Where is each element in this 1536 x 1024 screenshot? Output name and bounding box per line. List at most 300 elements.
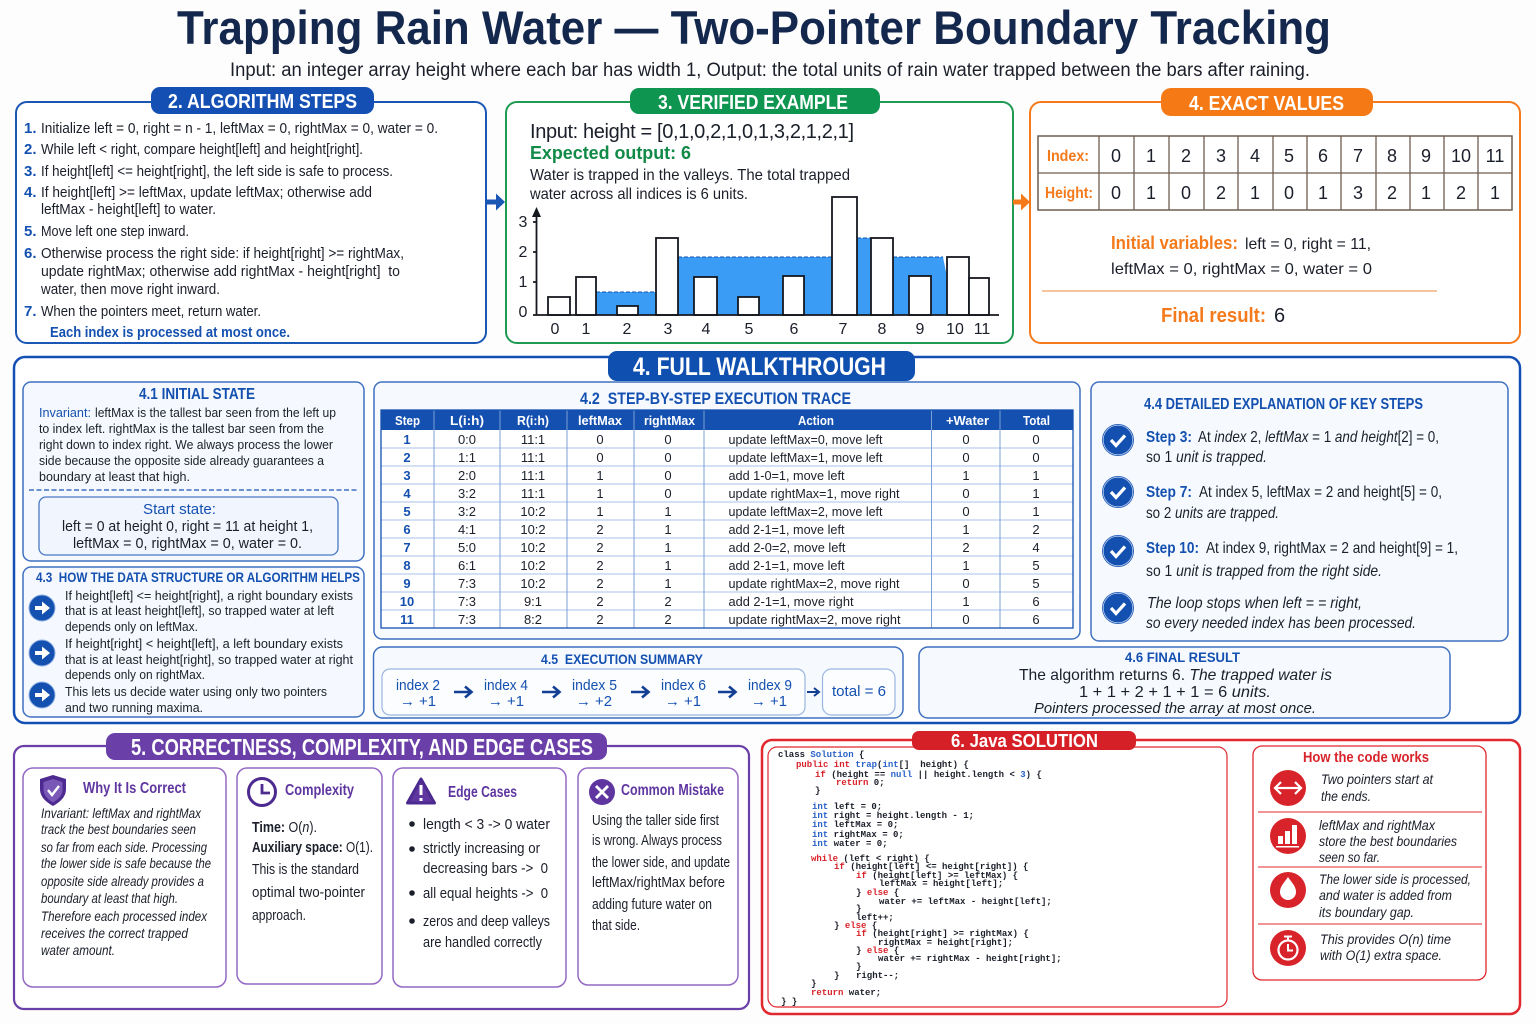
card text: opposite side already provides a (41, 873, 204, 889)
heading: verified example: 3. VERIFIED EXAMPLE (658, 92, 848, 114)
panel: verified example (506, 88, 1013, 343)
table: index and height: 1 (1146, 146, 1156, 166)
note: two pointers (1321, 771, 1434, 804)
panel: full walkthrough (14, 351, 1520, 723)
table: execution trace: 0 (664, 432, 672, 447)
code block: water += leftMax - height[left]; (879, 897, 1052, 907)
table: index and height: 4 (1250, 146, 1260, 166)
code block: } else { (856, 946, 899, 956)
icon: bars (1270, 818, 1306, 854)
initial variables: left = 0, right = 11, (1245, 236, 1371, 253)
table: execution trace: 2 (664, 594, 672, 609)
note: two pointers: the ends. (1321, 788, 1371, 804)
table: index and height (1038, 136, 1512, 210)
explanation: step 3: so 1 unit is trapped. (1146, 449, 1267, 466)
helper text one (65, 588, 353, 634)
step list: update rightMax; otherwise add rightMax - height[right] to (41, 263, 400, 280)
explanation: step 10: so 1 unit is trapped from the right side. (1146, 563, 1382, 580)
explanation: step 7: At index 5, leftMax = 2 and height[5] = 0, (1199, 484, 1442, 501)
total box (822, 669, 895, 715)
code block: if (height[left] <= height[right]) { (834, 862, 1028, 872)
bar chart: elevation and trapped water: 1 (582, 321, 591, 338)
table: execution trace: 0 (664, 450, 672, 465)
step list: 5. (24, 223, 37, 240)
table: execution trace: 9 (403, 576, 411, 591)
explanation: step 7 (1146, 484, 1442, 522)
table: execution trace: 0 (962, 612, 970, 627)
note: best boundaries: leftMax and rightMax (1319, 817, 1436, 833)
bar chart: elevation and trapped water: 10 (946, 321, 964, 338)
code block: return 0; (836, 778, 885, 788)
icon: shield (40, 775, 66, 806)
edge case list (409, 816, 550, 951)
table: execution trace: 1 (596, 468, 604, 483)
table: execution trace: update rightMax=2, move right (728, 576, 900, 591)
table: index and height: 0 (1111, 183, 1121, 203)
note: lower side: its boundary gap. (1319, 904, 1414, 920)
example note (529, 167, 850, 203)
table: index and height: 9 (1421, 146, 1431, 166)
step list: 7. (24, 303, 37, 320)
example note: water across all indices is 6 units. (529, 186, 748, 203)
panel: how the code works (1253, 746, 1486, 980)
table: index and height: 1 (1146, 183, 1156, 203)
table: execution trace: 6 (403, 522, 411, 537)
card text: the lower side, and update (592, 854, 730, 871)
explanation: loop stop (1146, 595, 1416, 632)
panel: final result (919, 647, 1450, 718)
code block: } } (781, 997, 797, 1007)
code block: public int trap(int[] height) { (796, 760, 969, 770)
table: execution trace: 4:1 (458, 522, 476, 537)
table: execution trace: +Water (946, 413, 989, 428)
table: execution trace: 11 (400, 612, 414, 627)
table: index and height: 1 (1490, 183, 1500, 203)
final result text: 1 + 1 + 2 + 1 + 1 = 6 units. (1079, 684, 1271, 701)
table: index and height: 7 (1353, 146, 1363, 166)
table: execution trace: 6 (1032, 612, 1040, 627)
table: execution trace: update leftMax=1, move left (728, 450, 883, 465)
summary flow: → +1 (665, 693, 701, 710)
initial variables: leftMax = 0, rightMax = 0, water = 0 (1111, 261, 1372, 278)
table: execution trace: add 2-1=1, move left (728, 558, 845, 573)
note: lower side: and water is added from (1319, 887, 1452, 903)
step list: When the pointers meet, return water. (41, 303, 261, 320)
summary flow: index 5 (572, 677, 617, 694)
table: index and height: Index: (1047, 148, 1089, 165)
table: execution trace: 2 (596, 594, 604, 609)
summary flow (396, 677, 819, 710)
code block: int leftMax = 0; (812, 820, 898, 830)
table: index and height: 0 (1284, 183, 1294, 203)
table: execution trace: 1 (664, 576, 672, 591)
table: execution trace: 0 (664, 486, 672, 501)
table: execution trace: R(i:h) (517, 413, 549, 428)
table: execution trace: 1 (1032, 486, 1040, 501)
table: execution trace: update leftMax=0, move left (728, 432, 883, 447)
table: execution trace: 1 (1032, 504, 1040, 519)
heading: execution trace: 4.2 STEP-BY-STEP EXECUTION TRACE (580, 389, 851, 408)
explanation: step 3 (1146, 429, 1439, 466)
bar chart: elevation and trapped water: 4 (702, 321, 711, 338)
summary flow: → +1 (400, 693, 436, 710)
card text: optimal two-pointer (252, 884, 365, 901)
card text: so far from each side. Processing (41, 839, 207, 855)
table: execution trace: 1 (596, 486, 604, 501)
card text: track the best boundaries seen (41, 821, 196, 837)
start state box: leftMax = 0, rightMax = 0, water = 0. (73, 535, 302, 552)
heading: algorithm steps: 2. ALGORITHM STEPS (168, 91, 357, 113)
icon: arrow one (29, 595, 55, 621)
table: execution trace: 2:0 (458, 468, 476, 483)
code block: rightMax = height[right]; (878, 938, 1013, 948)
table: index and height: 1 (1250, 183, 1260, 203)
step list: Initialize left = 0, right = n - 1, leftMax = 0, rightMax = 0, water = 0. (41, 120, 438, 137)
panel: exact values (1030, 88, 1520, 343)
code block: if (height[right] >= rightMax) { (856, 929, 1029, 939)
helper text one: that is at least height[left], so trapped water at left (65, 603, 334, 618)
final result: 6 (1274, 305, 1285, 327)
final result text: The algorithm returns 6. The trapped water is (1019, 667, 1332, 684)
initial variables: Initial variables: (1111, 233, 1238, 253)
start state box (39, 497, 338, 555)
card text: water amount. (41, 942, 115, 958)
table: execution trace: 0 (596, 432, 604, 447)
icon: check two (1102, 476, 1134, 508)
heading: execution summary: 4.5 EXECUTION SUMMARY (541, 652, 703, 667)
explanation: loop stop: so every needed index has been processed. (1146, 615, 1416, 632)
card text: Invariant: leftMax and rightMax (41, 805, 202, 821)
panel: algorithm steps (16, 87, 486, 343)
table: execution trace: 3:2 (458, 486, 476, 501)
bar chart: elevation and trapped water: 6 (790, 321, 799, 338)
card: complexity (237, 768, 382, 984)
card text (592, 812, 730, 934)
helper text one: depends only on leftMax. (65, 619, 198, 634)
edge case list: strictly increasing or (423, 840, 540, 857)
icon: water drop (1270, 872, 1306, 908)
code block: int rightMax = 0; (812, 830, 904, 840)
table: execution trace: 0 (664, 468, 672, 483)
table: execution trace: 1 (1032, 468, 1040, 483)
table: index and height: 10 (1451, 146, 1471, 166)
panel: correctness, complexity, edge cases (14, 733, 749, 1009)
card: edge cases (393, 768, 566, 987)
code block: int left = 0; (812, 802, 882, 812)
table: execution trace: Action (798, 413, 834, 428)
note: best boundaries: seen so far. (1319, 849, 1380, 865)
table: execution trace: 10:2 (520, 558, 546, 573)
table: index and height: 2 (1181, 146, 1191, 166)
card: common mistake (578, 768, 738, 985)
summary flow: index 2 (396, 677, 440, 694)
code block: } (856, 904, 861, 914)
summary flow: index 9 (748, 677, 792, 694)
table: execution trace: rightMax (644, 413, 696, 428)
explanation: step 3: Step 3: (1146, 429, 1192, 446)
explanation: step 10 (1146, 540, 1458, 580)
card text: This is the standard (252, 861, 359, 878)
table: execution trace: 1 (403, 432, 411, 447)
helper text three: and two running maxima. (65, 700, 203, 715)
table: execution trace: 10:2 (520, 540, 546, 555)
heading: full walkthrough: 4. FULL WALKTHROUGH (633, 353, 886, 381)
table: execution trace: 2 (596, 558, 604, 573)
table: execution trace: 2 (596, 612, 604, 627)
table: index and height: 11 (1486, 146, 1504, 166)
card text: receives the correct trapped (41, 925, 189, 941)
invariant text: to index left. rightMax is the tallest bar seen from the (39, 421, 324, 436)
explanation: step 10: At index 9, rightMax = 2 and height[9] = 1, (1206, 540, 1458, 557)
code block: int right = height.length - 1; (812, 811, 974, 821)
step list: Otherwise process the right side: if height[right] >= rightMax, (41, 245, 404, 262)
invariant text (39, 405, 336, 484)
code block: } (856, 962, 861, 972)
table: execution trace: add 1-0=1, move left (728, 468, 845, 483)
table: execution trace: 10:2 (520, 576, 546, 591)
bar chart: elevation and trapped water: 2 (519, 244, 528, 261)
explanation: step 10: Step 10: (1146, 540, 1199, 557)
card text: Auxiliary space: O(1). (252, 839, 373, 856)
code block: right--; (856, 971, 899, 981)
explanation: step 7: Step 7: (1146, 484, 1192, 501)
heading: how the algorithm helps: 4.3 HOW THE DATA STRUCTURE OR ALGORITHM HELPS (36, 569, 360, 585)
card text: Using the taller side first (592, 812, 720, 829)
icon: check three (1102, 536, 1134, 566)
code block: } (834, 971, 839, 981)
step list: If height[left] >= leftMax, update leftMax; otherwise add (41, 184, 372, 201)
heading: final result: 4.6 FINAL RESULT (1125, 650, 1241, 665)
table: execution trace: 4 (403, 486, 411, 501)
bar chart: elevation and trapped water: 3 (664, 321, 673, 338)
input text: Input: height = [0,1,0,2,1,0,1,3,2,1,2,1] (530, 121, 854, 143)
card text: Time: O(n). (252, 819, 317, 836)
table: execution trace: 5:0 (458, 540, 476, 555)
heading: java solution: 6. Java SOLUTION (951, 731, 1098, 751)
table: execution trace: 5 (1032, 558, 1040, 573)
table: execution trace: 9:1 (524, 594, 542, 609)
table: execution trace: 0 (962, 576, 970, 591)
table: execution trace: 10:2 (520, 504, 546, 519)
table: execution trace: 2 (596, 576, 604, 591)
code block: if (height == null || height.length < 3) { (815, 770, 1042, 780)
step list: 3. (24, 163, 37, 180)
icon: check four (1102, 592, 1134, 624)
card title: Common Mistake (621, 782, 724, 799)
card text (252, 819, 373, 924)
table: execution trace: 1 (962, 522, 970, 537)
table: index and height: 3 (1216, 146, 1226, 166)
panel: java solution (762, 731, 1520, 1014)
note: complexity: with O(1) extra space. (1320, 947, 1442, 963)
table: execution trace: 11:1 (521, 468, 545, 483)
table: execution trace: 2 (403, 450, 411, 465)
table: execution trace: L(i:h) (450, 413, 484, 428)
icon: stopwatch (1270, 930, 1306, 966)
table: execution trace: 0 (962, 486, 970, 501)
card text: leftMax/rightMax before (592, 874, 725, 891)
code block: } else { (856, 888, 899, 898)
total box: total = 6 (832, 683, 886, 700)
explanation: step 3: At index 2, leftMax = 1 and height[2] = 0, (1198, 429, 1439, 446)
table: index and height: 2 (1456, 183, 1466, 203)
table: execution trace: 7:3 (458, 594, 476, 609)
card text: adding future water on (592, 896, 712, 913)
step list: 1. (24, 120, 37, 137)
icon: warning (408, 779, 434, 803)
table: execution trace: update leftMax=2, move left (728, 504, 883, 519)
table: execution trace: 2 (664, 612, 672, 627)
step list: 2. (24, 141, 37, 158)
table: execution trace: 3:2 (458, 504, 476, 519)
note: lower side (1319, 871, 1471, 920)
table: execution trace: 1 (962, 468, 970, 483)
note: best boundaries (1319, 817, 1457, 865)
table: execution trace: 2 (1032, 522, 1040, 537)
code block: if (height[left] >= leftMax) { (856, 871, 1018, 881)
summary flow: → +1 (488, 693, 524, 710)
bar chart: elevation and trapped water: 8 (878, 321, 887, 338)
panel: execution trace (374, 382, 1080, 639)
bar chart: elevation and trapped water: 11 (974, 321, 990, 338)
explanation: loop stop: The loop stops when left = = right, (1147, 595, 1362, 612)
icon: two pointers (1270, 770, 1306, 806)
bar chart: elevation and trapped water: 9 (916, 321, 925, 338)
helper text two (65, 636, 353, 682)
icon: arrow three (29, 682, 55, 708)
heading: exact values (1161, 88, 1373, 116)
step list: leftMax - height[left] to water. (41, 201, 216, 218)
card text: approach. (252, 907, 306, 924)
card text: Therefore each processed index (41, 908, 208, 924)
heading: detailed explanation: 4.4 DETAILED EXPLANATION OF KEY STEPS (1144, 396, 1423, 413)
code block: } (811, 979, 816, 989)
table: execution trace: Step (395, 413, 420, 428)
table: index and height: 1 (1318, 183, 1328, 203)
note: complexity (1320, 931, 1451, 963)
example note: Water is trapped in the valleys. The total trapped (530, 167, 850, 184)
table: execution trace: 0 (962, 432, 970, 447)
table: execution trace: 2 (596, 522, 604, 537)
invariant text: right down to index right. We always process the lower (39, 437, 334, 452)
summary flow: index 6 (661, 677, 706, 694)
bar chart: elevation and trapped water: 5 (745, 321, 754, 338)
note: two pointers: Two pointers start at (1321, 771, 1434, 787)
bar chart: elevation and trapped water: 7 (839, 321, 848, 338)
table: execution trace: 7 (403, 540, 411, 555)
code block: leftMax = height[left]; (879, 879, 1003, 889)
edge case list: length < 3 -> 0 water (423, 816, 550, 833)
table: execution trace: 0 (1032, 432, 1040, 447)
table: execution trace: 1 (596, 504, 604, 519)
table: index and height: 2 (1216, 183, 1226, 203)
edge case list: all equal heights -> 0 (423, 885, 548, 902)
table: execution trace: add 2-1=1, move right (728, 594, 854, 609)
table: execution trace: 3 (403, 468, 411, 483)
subtitle: Input: an integer array height where each bar has width 1, Output: the total units of rain water trapped between the bars after raining. (230, 60, 1310, 81)
table: execution trace: 1 (664, 558, 672, 573)
heading: initial state: 4.1 INITIAL STATE (139, 386, 255, 403)
table: execution trace: 0 (962, 504, 970, 519)
table: execution trace: Total (1023, 413, 1050, 428)
note: lower side: The lower side is processed, (1319, 871, 1471, 887)
table: execution trace: 0 (962, 450, 970, 465)
card text: boundary at least that high. (41, 890, 178, 906)
note: complexity: This provides O(n) time (1320, 931, 1451, 947)
table: execution trace: 1 (962, 594, 970, 609)
card text: is wrong. Always process (592, 832, 722, 849)
initial variables (1111, 233, 1372, 278)
table: execution trace: 0 (596, 450, 604, 465)
table: index and height: 0 (1111, 146, 1121, 166)
table: execution trace: 7:3 (458, 576, 476, 591)
final result: Final result: (1161, 305, 1266, 327)
table: execution trace: 1 (664, 540, 672, 555)
table: execution trace: update rightMax=2, move right (728, 612, 901, 627)
table: execution trace: 1 (962, 558, 970, 573)
table: execution trace: 1 (664, 522, 672, 537)
icon: clock (248, 778, 276, 806)
bar chart: elevation and trapped water: 3 (519, 214, 528, 231)
code block: int water = 0; (812, 839, 888, 849)
panel: initial state (23, 382, 364, 561)
bar chart: elevation and trapped water: 1 (519, 274, 528, 291)
table: execution trace: 5 (403, 504, 411, 519)
table: execution trace: 7:3 (458, 612, 476, 627)
panel: how the algorithm helps (23, 567, 364, 717)
arrow: example to values (1013, 194, 1030, 210)
table: execution trace: 8:2 (524, 612, 542, 627)
invariant text: boundary at least that high. (39, 469, 190, 484)
icon: check one (1102, 424, 1134, 456)
step list: water, then move right inward. (40, 281, 220, 298)
card title: Why It Is Correct (83, 780, 187, 797)
edge case list: are handled correctly (423, 934, 542, 951)
helper text one: If height[left] <= height[right], a right boundary exists (65, 588, 353, 603)
title: Trapping Rain Water — Two-Pointer Boundary Tracking (177, 1, 1331, 54)
heading: correctness: 5. CORRECTNESS, COMPLEXITY, AND EDGE CASES (131, 734, 593, 760)
table: execution trace: add 2-1=1, move left (728, 522, 845, 537)
panel: execution summary (374, 647, 903, 718)
step list: 4. (24, 184, 37, 201)
table: execution trace: add 2-0=2, move left (728, 540, 846, 555)
step list (24, 120, 438, 341)
table: execution trace: 11:1 (521, 486, 545, 501)
helper text two: If height[right] < height[left], a left boundary exists (65, 636, 343, 651)
icon: x mark (589, 779, 615, 805)
table: execution trace: 11:1 (521, 450, 545, 465)
table: index and height: 2 (1387, 183, 1397, 203)
table: execution trace: 0 (1032, 450, 1040, 465)
table: execution trace: 10:2 (520, 522, 546, 537)
icon: arrow two (29, 640, 55, 666)
table: execution trace: 6:1 (458, 558, 476, 573)
card title: Complexity (285, 782, 354, 799)
table: index and height: Height: (1045, 185, 1093, 202)
code block (768, 747, 1227, 1007)
bar chart: elevation and trapped water: 0 (551, 321, 560, 338)
bar chart: elevation and trapped water (519, 197, 999, 338)
code block: } (815, 786, 820, 796)
table: execution trace: 1 (664, 504, 672, 519)
summary flow: index 4 (484, 677, 528, 694)
table: execution trace: 5 (1032, 576, 1040, 591)
code block: water += rightMax - height[right]; (878, 954, 1062, 964)
table: index and height: 5 (1284, 146, 1294, 166)
final result text: Pointers processed the array at most once. (1034, 701, 1316, 717)
table: execution trace: update rightMax=1, move right (728, 486, 900, 501)
bar chart: elevation and trapped water: 0 (519, 304, 528, 321)
